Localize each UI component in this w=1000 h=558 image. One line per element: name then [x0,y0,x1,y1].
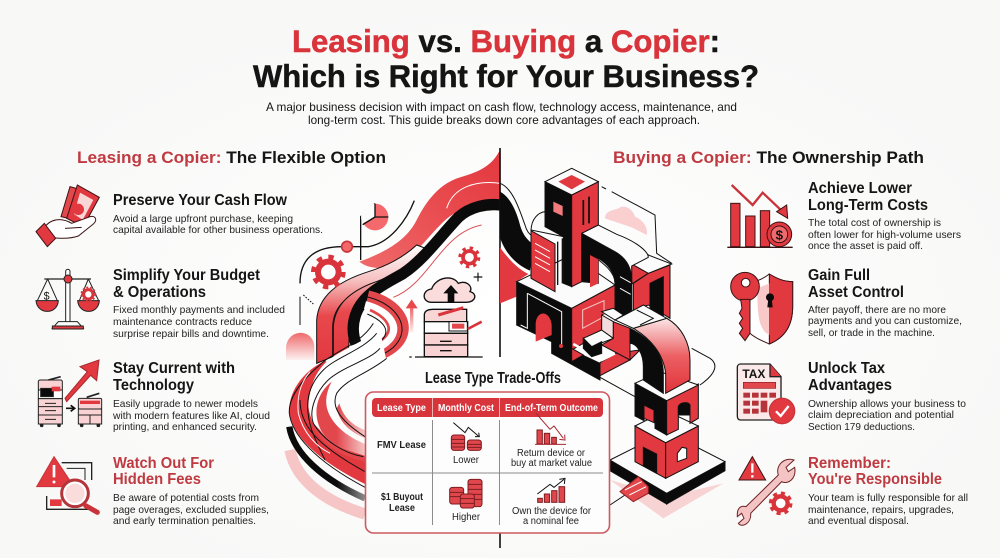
base shadow [610,480,723,518]
buying heading: Buying a Copier: The Ownership Path [613,148,924,167]
base platform [610,432,725,504]
title: Which is Right for Your Business? [253,58,759,94]
item: simplify budget: & Operations [113,284,206,301]
slab under pipe [602,308,630,360]
icon: falling bars with coin: $ [776,227,784,242]
pale arch [286,333,314,360]
item: simplify budget [36,267,285,340]
icon: key and shield [731,272,793,344]
item: stay current: with modern features like AI, cloud [112,410,270,422]
icon: small coin stacks with down arrow [451,423,481,450]
second red strand [316,382,365,456]
item: stay current: Technology [113,377,194,394]
text: hidden fees: Watch Out For [113,455,214,472]
icon: tax calculator: TAX [742,367,765,381]
item: stay current [38,360,270,433]
subtitle [266,100,737,127]
white curve on flame [447,183,501,208]
row: $1 buyout lease [381,478,592,527]
row: FMV lease: Lower [453,455,480,466]
item: tax: Section 179 deductions. [808,421,915,433]
table header: Lease Type [377,403,426,414]
icon: warning with magnifier [37,457,97,512]
title [253,23,759,94]
leasing heading: Leasing a Copier: The Flexible Option [77,148,386,167]
row: $1 buyout lease: a nominal fee [523,516,579,527]
item: responsibility [737,455,968,527]
upper loop [330,298,401,372]
row: FMV lease [377,413,592,469]
item: asset control: payments and you can customize, [808,315,962,327]
item: asset control [731,267,962,344]
item: stay current: Easily upgrade to newer models [113,398,258,410]
white strand field [309,330,387,458]
connector node [342,241,352,252]
right block [632,255,672,318]
stairs [620,477,648,502]
tower [531,168,598,292]
third pale strand [337,403,365,438]
copier icon [409,308,483,357]
text: responsibility: Remember: [808,455,891,472]
item: lower costs: once the asset is paid off. [808,240,923,252]
panel: leasing [36,148,386,527]
item: tax: Advantages [808,377,892,394]
item: preserve cash flow [36,185,323,247]
black ribbon [353,205,501,344]
item: hidden fees [37,455,269,527]
red flame ribbon [359,148,501,268]
black under-band [289,427,365,498]
item: responsibility: and eventual disposal. [808,515,909,527]
main red band [289,361,365,484]
lease table [366,370,610,533]
item: lower costs: Long-Term Costs [808,197,928,214]
central illustration: leasing ribbons [286,148,501,514]
block: lower base [635,411,698,478]
up arrow [406,299,418,332]
item: responsibility: Your team is fully responsible for all [808,492,968,504]
item: simplify budget: surprise repair bills and downtime. [113,328,269,340]
row: FMV lease: FMV Lease [377,440,426,451]
band: inner pink arc [333,240,437,360]
item: stay current: printing, and enhanced security. [113,421,257,433]
plus sign [474,273,482,281]
item: asset control: After payoff, there are no more [808,304,946,316]
item: hidden fees: Be aware of potential costs from [113,492,259,504]
subtitle: long-term cost. This guide breaks down core advantages of each approach. [308,113,700,127]
table header: Monthly Cost [438,403,495,414]
band: outer pink arc [317,245,430,363]
item: simplify budget: maintenance contracts reduce [113,316,252,328]
item: tax: claim depreciation and potential [808,409,954,421]
subtitle: A major business decision with impact on cash flow, technology access, maintenance, and [266,100,737,114]
icon: large coin stacks [450,479,482,508]
row: $1 buyout lease: Higher [452,512,481,523]
row: FMV lease: Return device or [517,448,586,459]
text: tax: Unlock Tax [808,360,885,377]
block: upper arches [635,372,698,435]
icon: tax calculator [737,364,795,424]
table header: End-of-Term Outcome [505,403,598,414]
item: lower costs: The total cost of ownership is [808,217,941,229]
item: simplify budget: Fixed monthly payments and included [113,304,285,316]
text: asset control: Gain Full [808,267,870,284]
item: tax: Ownership allows your business to [808,398,966,410]
table header [372,398,603,417]
row: $1 buyout lease: Own the device for [512,506,592,517]
gear left [313,257,343,287]
row: FMV lease: buy at market value [511,458,592,469]
title: Leasing vs. Buying a Copier: [292,23,720,59]
thin line network [300,201,414,325]
item: lower costs [727,180,961,252]
text: simplify: Simplify Your Budget [113,267,260,284]
bridge: pink arch [615,305,690,393]
gear small [460,248,479,267]
pink under-band [290,450,365,514]
pale cloud [605,207,647,235]
item: asset control: sell, or trade in the machine. [808,327,935,339]
center divider [499,148,501,548]
item: preserve cash flow: Avoid a large upfront purchase, keeping [113,213,293,225]
icon: balance scale [36,269,99,329]
bridge: black arch [582,225,648,320]
cloud upload icon [424,278,475,302]
text: preserve: Preserve Your Cash Flow [113,192,288,209]
icon: warning, wrench and gear [737,457,795,525]
item: hidden fees: page overages, excluded supplies, [113,504,269,516]
row: $1 buyout lease: $1 Buyout [381,492,424,503]
icon: copier upgrade [38,360,102,427]
lower ribbon bundle [289,297,402,514]
ribbon continuation [500,183,533,303]
icon: falling bar chart [535,413,566,444]
item: tax [737,360,966,433]
pie icon [361,204,388,230]
text: stay current: Stay Current with [113,360,235,377]
thin red curve [393,225,482,297]
mid platform [517,255,640,380]
panel: buying [613,148,968,527]
table heading: Lease Type Trade-Offs [425,370,561,387]
item: lower costs: often lower for high-volume users [808,229,961,241]
item: responsibility: You're Responsible [808,471,942,488]
central illustration: isometric building [500,168,725,518]
row: $1 buyout lease: Lease [389,503,415,514]
text: lower costs: Achieve Lower [808,180,912,197]
item: preserve cash flow: capital available for other business operations. [113,224,323,236]
icon: balance scale: $ [44,290,50,302]
table card [366,392,610,533]
icon: hand with money [36,185,99,247]
outline lines [600,187,715,505]
item: responsibility: maintenance, repairs, upgrades, [808,504,954,516]
item: hidden fees: and early termination penalties. [113,515,256,527]
item: hidden fees: Hidden Fees [113,471,201,488]
strand outlines [289,323,373,487]
icon: rising bar chart [537,478,565,502]
icon: falling bars with coin [727,185,793,247]
item: asset control: Asset Control [808,284,904,301]
